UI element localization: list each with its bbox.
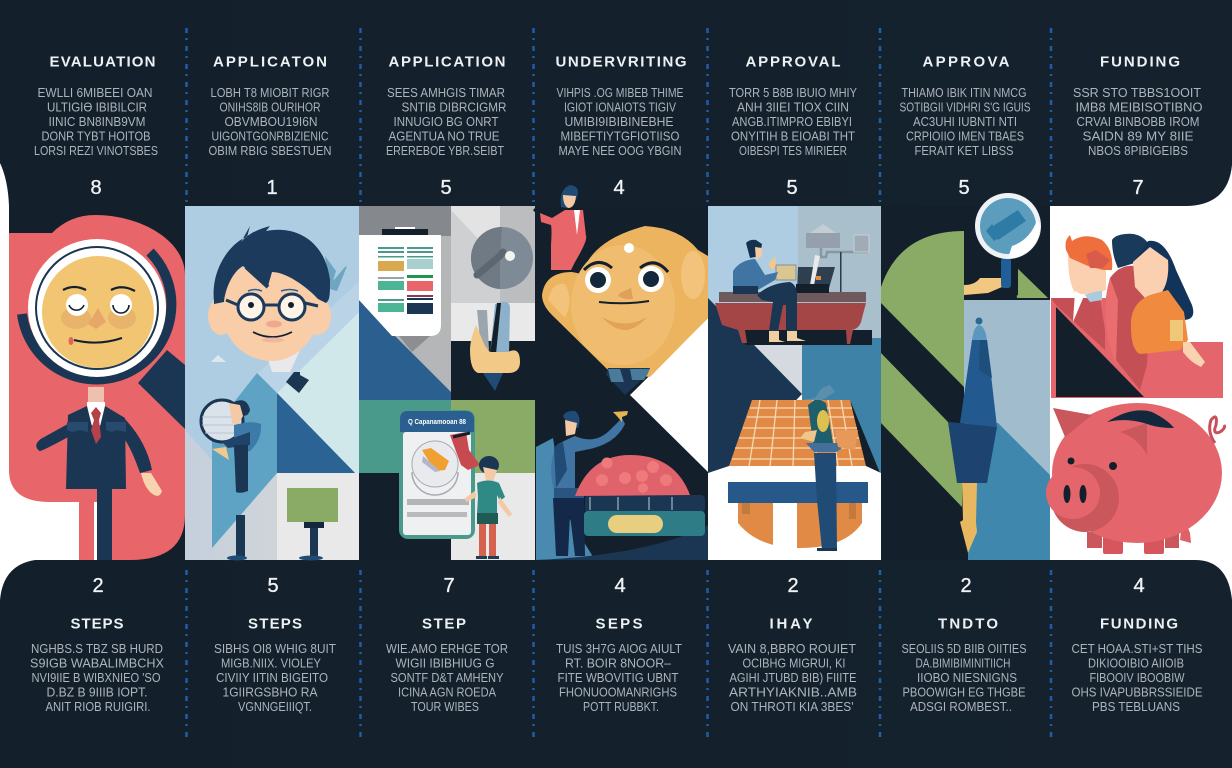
column 4 bottom text: 4 xyxy=(614,575,626,597)
person on sofa with laptop xyxy=(715,224,872,345)
column 6 top text: THIAMO IBIK ITIN NMCG xyxy=(902,86,1026,100)
dashed column dividers xyxy=(186,28,1051,740)
column 1 bottom text: NGHBS.S TBZ SB HURD xyxy=(31,642,163,656)
column 4 top text: IGIOT IONAIOTS TIGIV xyxy=(564,100,677,114)
column 3 top text: INNUGIO BG ONRT xyxy=(394,115,499,129)
panel: funding illustration xyxy=(1046,206,1232,560)
fountain pen xyxy=(948,318,997,553)
column 7 top text: SSR STO TBBS1OOIT xyxy=(1073,86,1201,100)
column 3 top text: APPLICATION xyxy=(388,54,506,70)
column 5 bottom text: OCIBHG MIGRUI, KI xyxy=(742,656,846,670)
bottom dark band xyxy=(0,560,1232,768)
panel: underwriting illustration xyxy=(533,185,708,560)
column 1 top text: 8 xyxy=(90,177,102,199)
tiled roof xyxy=(708,400,881,553)
column 3 bottom text: STEP xyxy=(422,616,466,632)
column 6 top text: 5 xyxy=(958,177,970,199)
column 7 top text xyxy=(1073,54,1203,199)
column 6 bottom text: DA.BIMIBIMINITIICH xyxy=(916,656,1010,670)
column 7 bottom text: PBS TEBLUANS xyxy=(1092,700,1180,714)
column 6 top text: CRPIOIIO IMEN TBAES xyxy=(906,130,1024,144)
column 1 bottom text: S9IGB WABALIMBCHX xyxy=(30,656,165,670)
column 5 top text: TORR 5 B8B IBUIO MHIY xyxy=(729,86,858,100)
column 5 bottom text: AGIHI JTUBD BIB) FIIITE xyxy=(730,671,856,685)
column 3 bottom text: TOUR WIBES xyxy=(411,700,479,714)
top dark band xyxy=(0,0,1232,206)
column 2 bottom text: 1GIIRGSBHO RA xyxy=(222,686,318,700)
panel: application form and hand illustration xyxy=(359,206,535,560)
column 2 top text: OBVMBOU19I6N xyxy=(224,115,318,129)
column 5 top text: APPROVAL xyxy=(746,54,840,70)
column 6 top text: FERAIT KET LIBSS xyxy=(914,144,1014,158)
column 4 bottom text: SEPS xyxy=(596,616,642,632)
small figure holding magnifier xyxy=(201,400,261,560)
panel: approval workspace illustration xyxy=(708,206,881,560)
icon: magnifier handle xyxy=(138,350,185,429)
column 2 bottom text: VGNNGEIIIQT. xyxy=(238,700,312,714)
column 4 top text: 4 xyxy=(613,177,625,199)
icon: curly tail xyxy=(1210,417,1224,443)
column 1 bottom text: 2 xyxy=(92,575,104,597)
portrait: man with glasses xyxy=(208,226,347,393)
column 2 top text: APPLICATON xyxy=(213,54,327,70)
column 6 bottom text: TNDTO xyxy=(938,616,998,632)
column 5 top text: 5 xyxy=(786,177,798,199)
column 4 bottom text: TUIS 3H7G AIOG AIULT xyxy=(556,642,682,656)
column 5 bottom text: IHAY xyxy=(770,616,812,632)
column 2 top text: OBIM RBIG SBESTUEN xyxy=(208,144,332,158)
column 2 top text: ONIHS8IB OURIHOR xyxy=(220,100,320,114)
man in blue suit xyxy=(536,411,628,560)
column 2 bottom text: CIVIIY IITIN BIGEITO xyxy=(216,671,328,685)
column 5 top text: OIBESPI TES MIRIEER xyxy=(739,144,847,158)
column 3 top text: 5 xyxy=(440,177,452,199)
column 3 bottom text: WIGII IBIBHIUG G xyxy=(396,656,494,670)
column 5 bottom text xyxy=(728,575,857,714)
column 4 top text: UMIBI9IBIBINEBHE xyxy=(564,115,674,129)
column 6 top text: SOTIBGII VIDHRI S'G IGUIS xyxy=(900,100,1030,114)
column 6 top text xyxy=(900,54,1030,199)
column 2 bottom text: SIBHS OI8 WHIG 8UIT xyxy=(214,642,336,656)
column 4 bottom text: POTT RUBBKT. xyxy=(583,700,659,714)
woman in red dress xyxy=(533,185,586,270)
column 7 bottom text: FUNDING xyxy=(1100,616,1178,632)
column 1 bottom text xyxy=(30,575,165,714)
column 5 bottom text: ON THROTI KIA 3BES' xyxy=(730,700,854,714)
phone app: Q Capanamooan 88 xyxy=(408,419,466,426)
column 7 bottom text: 4 xyxy=(1133,575,1145,597)
column 5 bottom text: VAIN 8,BBRO ROUIET xyxy=(728,642,856,656)
gauge disc xyxy=(471,227,533,289)
column 5 top text: ANH 3IIEI TIOX CIIN xyxy=(737,100,849,114)
column 5 top text: ANGB.ITIMPRO EBIBYI xyxy=(732,115,852,129)
column 7 bottom text xyxy=(1072,575,1202,714)
column 4 bottom text: FITE WBOVITIG UBNT xyxy=(558,671,679,685)
icon: magnifier ring xyxy=(22,252,171,379)
column 2 bottom text xyxy=(214,575,336,714)
column 1 top text: LORSI REZI VINOTSBES xyxy=(34,144,158,158)
column 6 bottom text: PBOOWIGH EG THGBE xyxy=(902,686,1026,700)
form document xyxy=(359,227,441,352)
column 5 bottom text: ARTHYIAKNIB..AMB xyxy=(729,686,857,700)
column 6 bottom text: 2 xyxy=(960,575,972,597)
column 3 top text: SEES AMHGIS TIMAR xyxy=(387,86,505,100)
column 2 bottom text: 5 xyxy=(267,575,279,597)
column 3 top text: EREREBOE YBR.SEIBT xyxy=(386,144,504,158)
column 1 top text xyxy=(34,54,158,199)
column 4 top text: UNDERVRITING xyxy=(556,54,686,70)
column 6 bottom text: SEOLIIS 5D BIIB OIITIES xyxy=(902,642,1026,656)
column 4 top text: MAYE NEE OOG YBGIN xyxy=(558,144,682,158)
column 3 bottom text: ICINA AGN ROEDA xyxy=(398,686,497,700)
panel: application portrait illustration xyxy=(185,206,359,560)
column 7 bottom text: OHS IVAPUBBRSSIEIDE xyxy=(1072,686,1202,700)
couple on red seat xyxy=(1051,234,1223,398)
businessman figure xyxy=(37,387,162,560)
column 2 bottom text: MIGB.NIIX. VIOLEY xyxy=(221,656,322,670)
column 2 bottom text: STEPS xyxy=(248,616,302,632)
column 6 bottom text: IIOBO NIESNIGNS xyxy=(917,671,1017,685)
column 1 top text: EWLLI 6MIBEEI OAN xyxy=(38,86,152,100)
column 7 bottom text: DIKIOOIBIO AIIOIB xyxy=(1088,656,1184,670)
column 6 top text: APPROVA xyxy=(922,54,1010,70)
column 5 bottom text: 2 xyxy=(787,575,799,597)
column 2 top text: LOBH T8 MIOBIT RIGR xyxy=(210,86,330,100)
person with phone xyxy=(465,456,512,559)
column 7 top text: 7 xyxy=(1132,177,1144,199)
column 3 bottom text: SONTF D&T AMHENY xyxy=(390,671,504,685)
column 5 top text xyxy=(729,54,858,199)
column 2 top text: UIGONTGONRBIZIENIC xyxy=(212,130,328,144)
column 5 top text: ONYITIH B EIOABI THT xyxy=(731,130,855,144)
column 3 top text: AGENTUA NO TRUE xyxy=(388,130,500,144)
column 1 top text: IINIC BN8INB9VM xyxy=(48,115,146,129)
column 4 bottom text: FHONUOOMANRIGHS xyxy=(559,686,677,700)
column 1 bottom text: ANIT RIOB RUIGIRI. xyxy=(46,700,150,714)
column 7 bottom text: CET HOAA.STI+ST TIHS xyxy=(1072,642,1202,656)
column 2 top text: 1 xyxy=(266,177,278,199)
column 1 bottom text: NVI9IIE B WIBXNIEO 'SO xyxy=(32,671,161,685)
column 4 bottom text: RT. BOIR 8NOOR– xyxy=(565,656,671,670)
column 1 bottom text: STEPS xyxy=(70,616,124,632)
column 3 bottom text: WIE.AMO ERHGE TOR xyxy=(386,642,508,656)
column 7 top text: IMB8 MEIBISOTIBNO xyxy=(1076,100,1203,114)
column 3 top text xyxy=(386,54,506,199)
big smiling head xyxy=(542,226,708,395)
column 4 top text: MIBEFTIYTGFIOTIISO xyxy=(560,130,680,144)
face in magnifier xyxy=(42,256,154,368)
column 3 bottom text xyxy=(386,575,508,714)
hand holding pen xyxy=(470,302,520,391)
column 1 top text: ULTIGIƟ IBIBILCIR xyxy=(47,100,147,114)
column 6 top text: AC3UHI IUBNTI NTI xyxy=(913,115,1017,129)
column 7 top text: CRVAI BINBOBB IROM xyxy=(1076,115,1200,129)
column 3 bottom text: 7 xyxy=(443,575,455,597)
column 4 top text xyxy=(556,54,686,199)
small hand magnifier xyxy=(964,193,1048,299)
column 1 bottom text: D.BZ B 9IIIB IOPT. xyxy=(46,686,148,700)
column 1 top text: DONR TYBT HOITOB xyxy=(42,130,150,144)
panel: approval pen illustration xyxy=(881,193,1050,560)
column 2 top text xyxy=(208,54,332,199)
column 7 top text: NBOS 8PIBIGEIBS xyxy=(1088,144,1188,158)
column 3 top text: SNTIB DIBRCIGMR xyxy=(402,100,506,114)
phone app xyxy=(399,410,480,539)
column 6 bottom text xyxy=(902,575,1026,714)
icon: piggy bank xyxy=(1046,403,1224,554)
column 4 bottom text xyxy=(556,575,682,714)
column 7 top text: FUNDING xyxy=(1100,54,1180,70)
worker on roof xyxy=(800,385,858,551)
column 6 bottom text: ADSGI ROMBEST.. xyxy=(910,700,1012,714)
column 7 bottom text: FIBOOIV IBOOBIW xyxy=(1090,671,1185,685)
mushroom shaped table xyxy=(535,455,708,560)
panel: evaluation illustration xyxy=(9,206,185,560)
column 7 top text: SAIDN 89 MY 8IIE xyxy=(1082,130,1194,144)
desk monitor xyxy=(287,488,338,560)
column 4 top text: VIHPIS .OG MIBEB THIME xyxy=(556,86,684,100)
column 1 top text: EVALUATION xyxy=(50,54,156,70)
